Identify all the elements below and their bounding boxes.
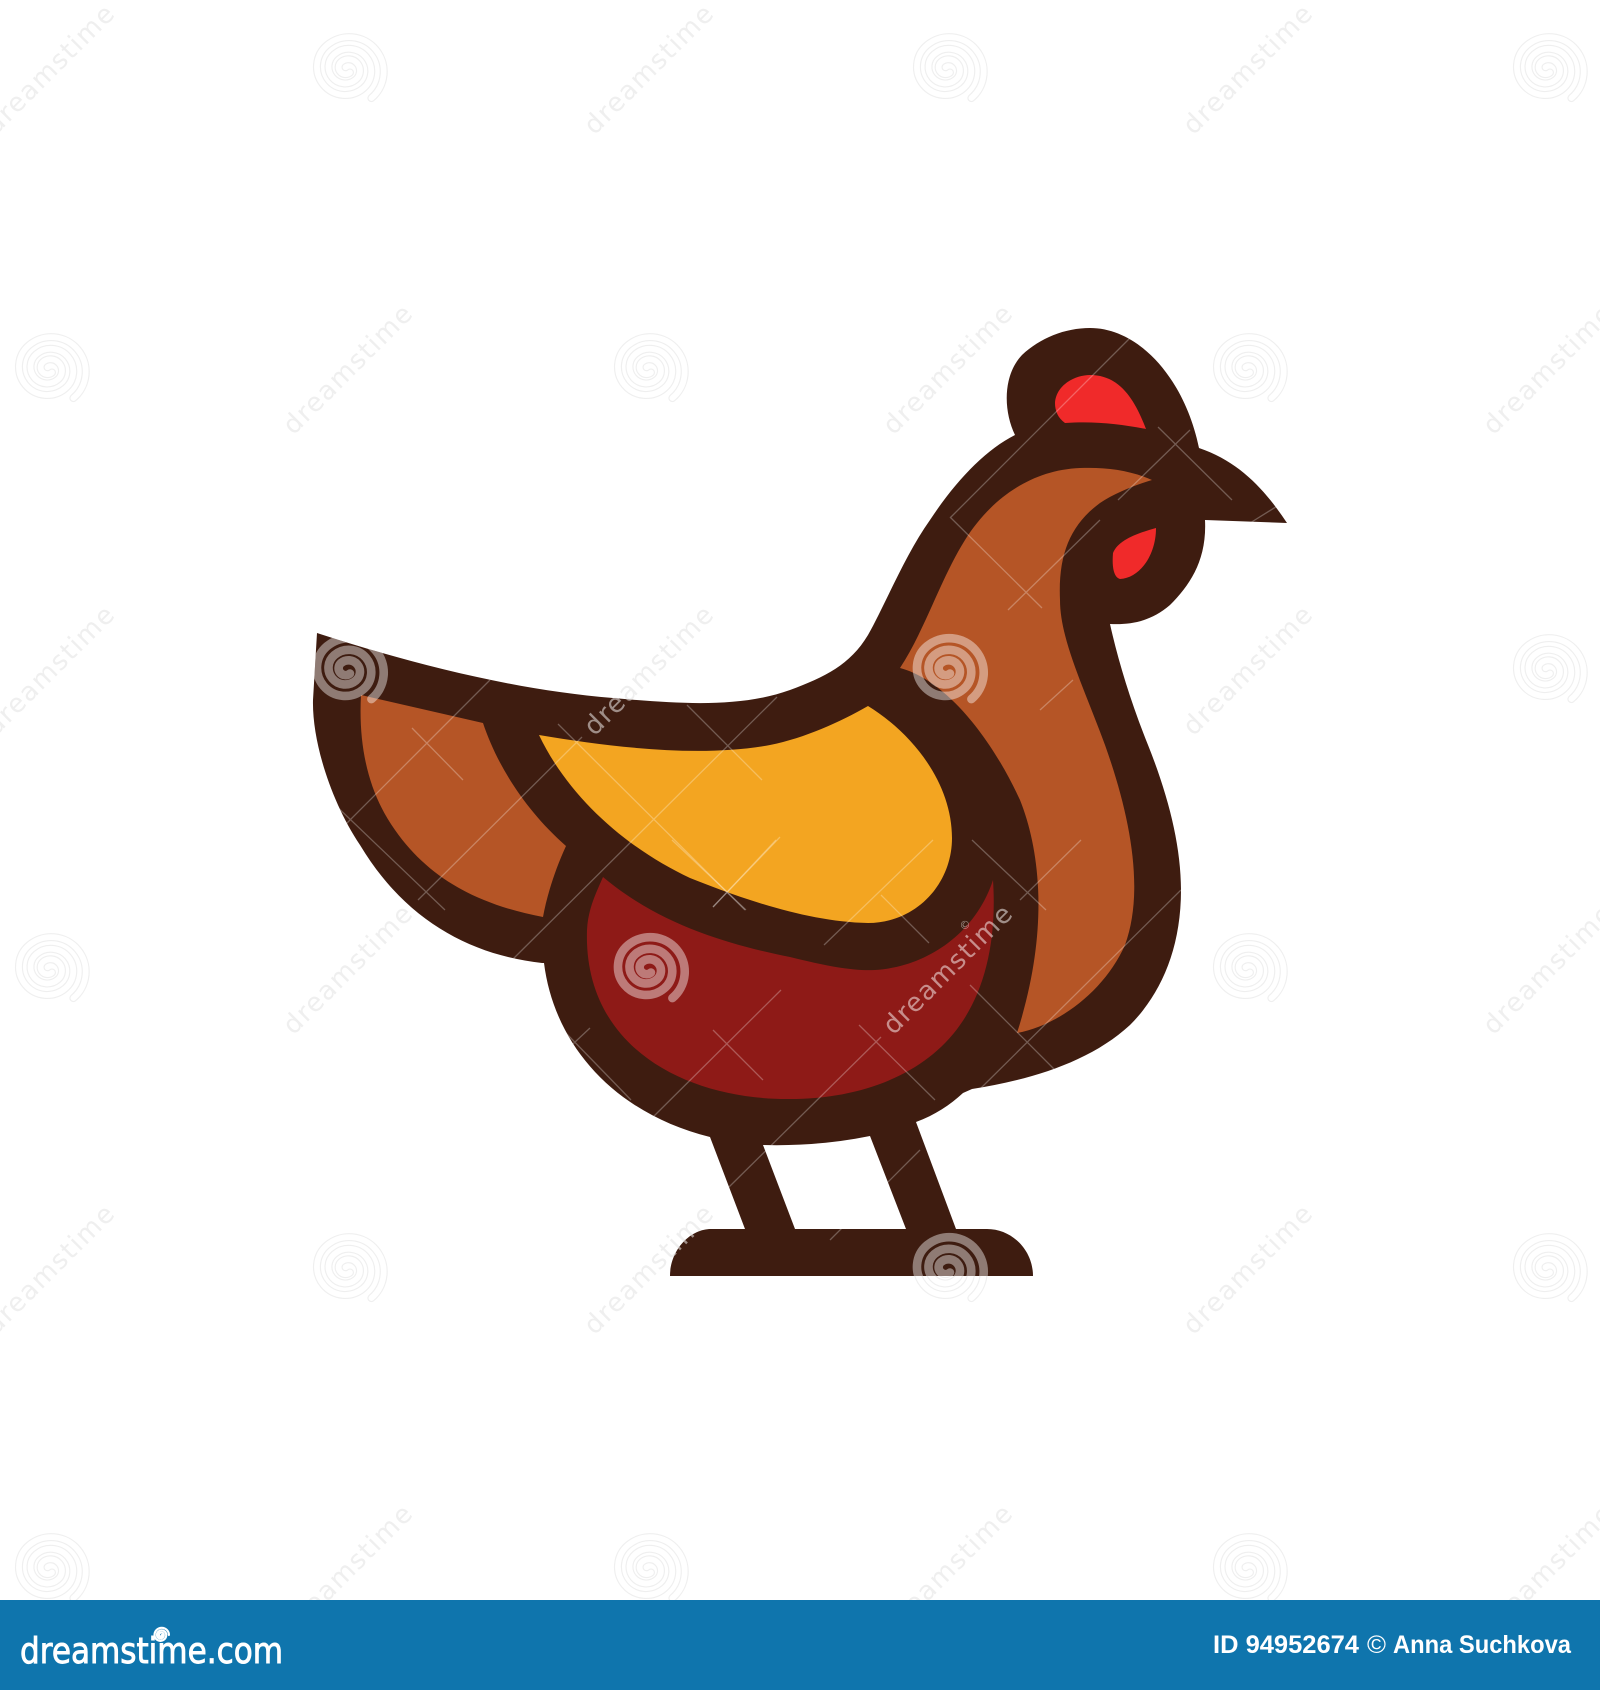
watermark: faint diagonal text on white: dreamstime — [277, 899, 419, 1041]
chicken: dark red belly — [587, 877, 994, 1099]
watermark: text on chicken: dreamstime — [877, 899, 1019, 1041]
watermark: faint diagonal text on white: dreamstime — [1177, 600, 1319, 742]
chicken: dark outline silhouette — [313, 328, 1287, 1276]
footer bar — [0, 1600, 1600, 1690]
chicken — [313, 328, 1287, 1276]
footer: dreamstime logo text: dreamstime.com — [20, 1631, 283, 1672]
chicken: tail feathers — [361, 695, 566, 917]
watermark: faint diagonal text on white: dreamstime — [1177, 0, 1319, 141]
watermark: thin crossing lines — [330, 338, 1287, 1240]
watermark: faint diagonal text on white: dreamstime — [877, 299, 1019, 441]
watermark: text on chicken — [588, 698, 1012, 1256]
watermark: text on chicken: dreamstime — [277, 899, 419, 1041]
chicken: red comb — [1055, 375, 1146, 429]
footer: image id and author: ID 94952674 — [1213, 1631, 1359, 1659]
watermark: overlay on chicken — [314, 338, 1276, 1276]
watermark: faint diagonal text on white: dreamstime — [277, 1499, 419, 1641]
watermark: faint diagonal text on white: dreamstime — [877, 1499, 1019, 1641]
chicken: orange neck and breast — [900, 468, 1152, 1033]
watermark: faint diagonal text on white: dreamstime — [578, 0, 720, 141]
footer: image id and author — [1213, 1631, 1572, 1659]
footer: image id and author: Anna Suchkova — [1393, 1631, 1572, 1659]
watermark: text on chicken: © — [957, 917, 974, 934]
watermark: spirals on chicken — [305, 624, 998, 1316]
chicken: red wattle — [1113, 528, 1156, 579]
footer: image id and author: © — [1367, 1631, 1387, 1659]
watermark: text on chicken: dreamstime — [578, 600, 720, 742]
watermark: faint diagonal text on white: dreamstime — [578, 1199, 720, 1341]
watermark: text on chicken: dreamstime — [578, 1199, 720, 1341]
watermark: faint diagonal text on white: dreamstime — [578, 600, 720, 742]
watermark: faint diagonal text on white: dreamstime — [277, 299, 419, 441]
footer: logo spiral icon — [155, 1628, 169, 1641]
chicken: yellow wing — [539, 706, 952, 923]
watermark: faint diagonal text on white: dreamstime — [1177, 1199, 1319, 1341]
